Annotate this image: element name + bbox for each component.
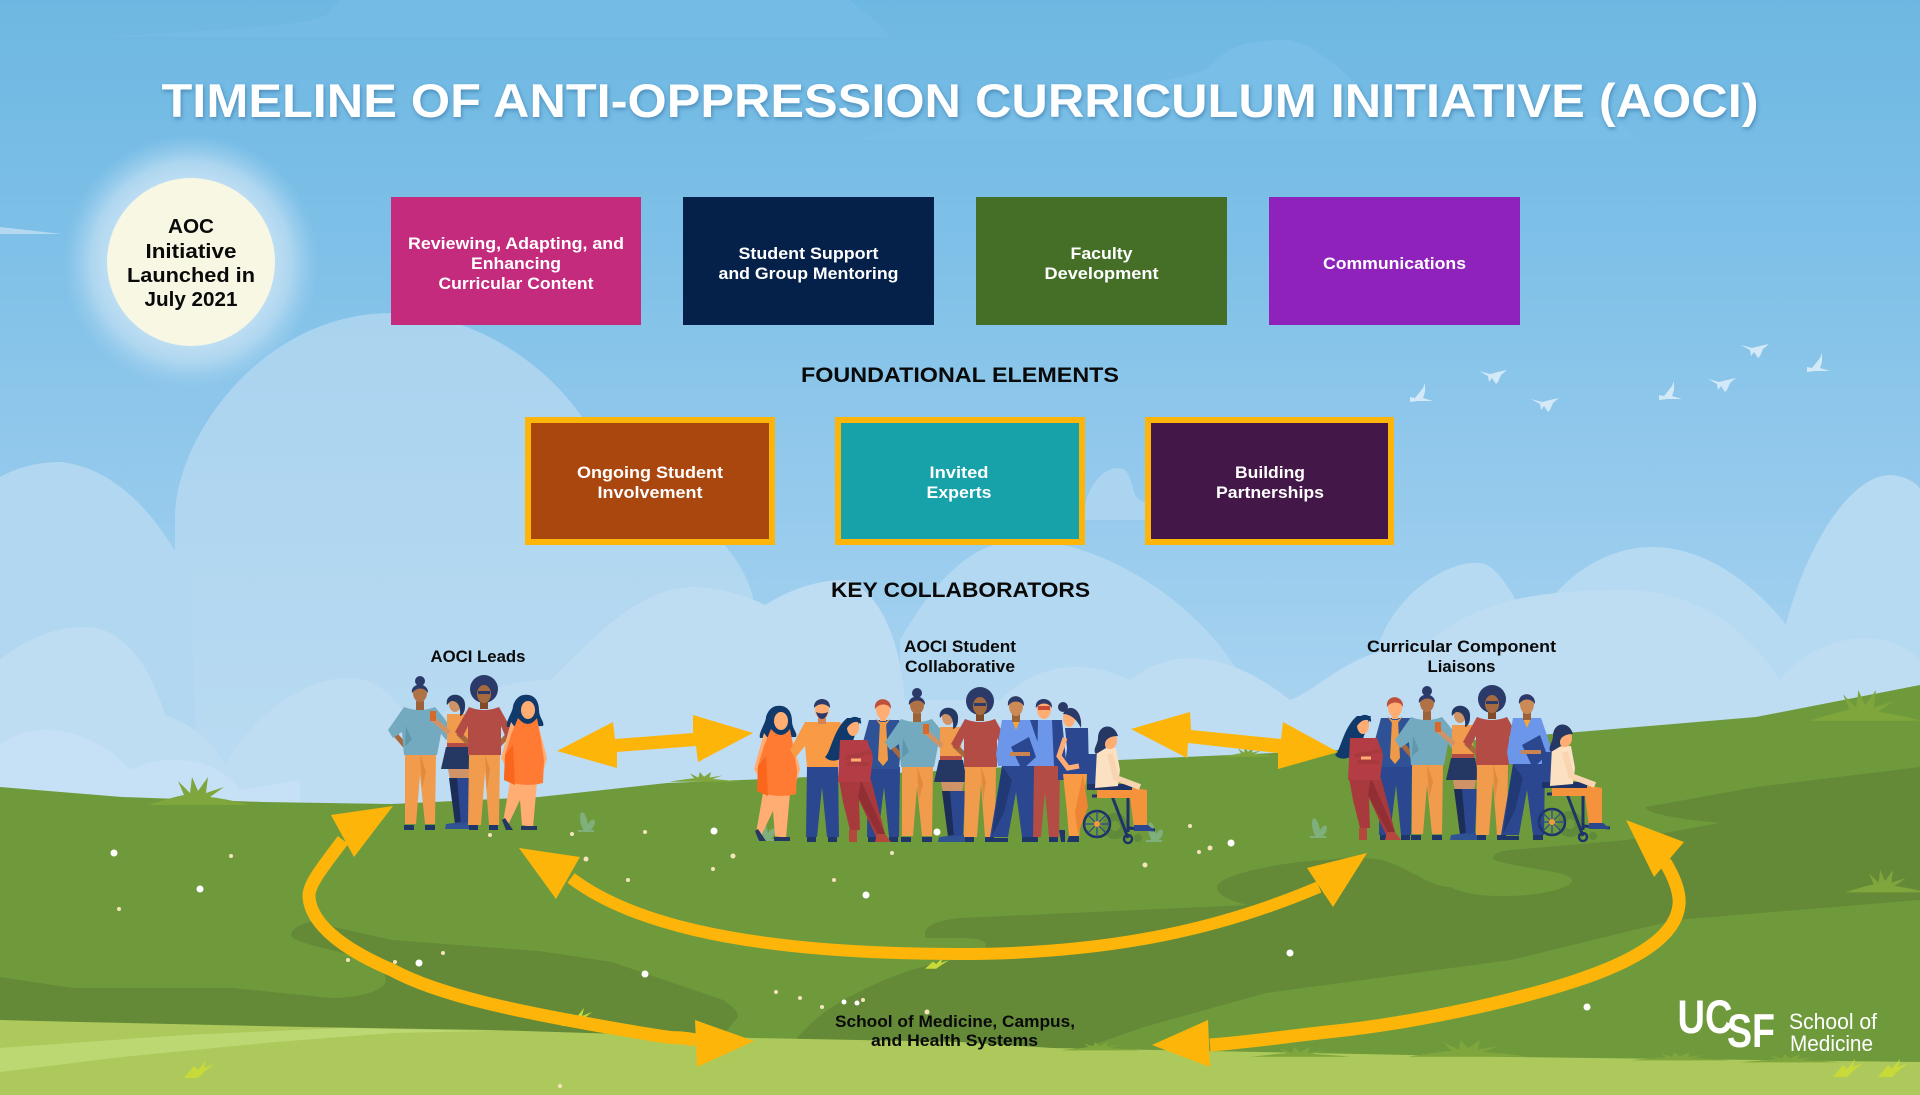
box: student support xyxy=(683,197,934,325)
label: Curricular Component Liaisons: Liaisons xyxy=(1428,657,1496,676)
label: AOCI Student Collaborative: Collaborative xyxy=(905,657,1015,676)
clouds xyxy=(0,0,1920,860)
box: building partnerships: Partnerships xyxy=(1216,483,1324,502)
label: School of Medicine, Campus, and Health Systems: School of Medicine, Campus, xyxy=(835,1012,1075,1031)
arrow: leads to liaisons (lower arc) xyxy=(519,848,1367,954)
box: student support: and Group Mentoring xyxy=(718,264,898,283)
box: building partnerships: Building xyxy=(1235,463,1305,482)
flowers xyxy=(110,824,1590,1088)
box: invited experts xyxy=(838,420,1082,542)
sun with halo xyxy=(63,134,319,390)
box: communications: Communications xyxy=(1323,254,1466,273)
people: curricular component liaisons group xyxy=(1335,685,1610,841)
heading: key collaborators: KEY COLLABORATORS xyxy=(831,579,1090,602)
arrow: liaisons to school of medicine xyxy=(1152,820,1684,1067)
logo: UCSF School of Medicine: SF xyxy=(1727,1004,1775,1057)
box: curricular content: Enhancing xyxy=(471,254,561,273)
label: Curricular Component Liaisons xyxy=(1367,637,1556,676)
people: student collaborative group xyxy=(754,687,1155,843)
box: curricular content xyxy=(391,197,641,325)
heading: foundational elements: FOUNDATIONAL ELEMENTS xyxy=(801,364,1119,387)
box: ongoing student involvement: Ongoing Student xyxy=(577,463,723,482)
logo: UCSF School of Medicine: UC xyxy=(1678,990,1732,1043)
arrow: leads to student collaborative xyxy=(557,715,753,768)
people: AOCI leads group xyxy=(388,675,547,830)
label: School of Medicine, Campus, and Health Systems xyxy=(835,1012,1075,1050)
label: School of Medicine, Campus, and Health Systems: and Health Systems xyxy=(871,1031,1038,1050)
box: curricular content: Curricular Content xyxy=(438,274,594,293)
title: TIMELINE OF ANTI-OPPRESSION CURRICULUM INITIATIVE (AOCI) xyxy=(162,75,1758,128)
label: AOCI Leads: AOCI Leads xyxy=(430,647,526,666)
label: AOCI Student Collaborative xyxy=(904,637,1016,676)
launch date text: July 2021 xyxy=(144,289,238,311)
small plants xyxy=(578,811,1329,843)
box: faculty development: Development xyxy=(1044,264,1159,283)
ground hills xyxy=(0,685,1920,1095)
birds xyxy=(1410,344,1830,412)
logo: UCSF School of Medicine: Medicine xyxy=(1790,1031,1873,1056)
launch date text: AOC xyxy=(168,216,214,238)
launch date text: Initiative xyxy=(146,241,236,263)
box: invited experts: Experts xyxy=(926,483,992,502)
logo: UCSF School of Medicine: School of xyxy=(1789,1009,1878,1034)
box: faculty development: Faculty xyxy=(1070,244,1133,263)
box: curricular content: Reviewing, Adapting, and xyxy=(408,234,624,253)
grass tufts xyxy=(148,690,1920,1062)
box: communications xyxy=(1269,197,1520,325)
box: ongoing student involvement xyxy=(528,420,772,542)
label: AOCI Student Collaborative: AOCI Student xyxy=(904,637,1016,656)
sky background xyxy=(0,0,1920,860)
launch date text: Launched in xyxy=(127,265,255,287)
box: invited experts: Invited xyxy=(930,463,988,482)
box: ongoing student involvement: Involvement xyxy=(598,483,703,502)
panel: curriculum pillars row xyxy=(391,197,1520,325)
box: building partnerships xyxy=(1148,420,1391,542)
logo: UCSF School of Medicine xyxy=(1678,990,1878,1057)
label: Curricular Component Liaisons: Curricular Component xyxy=(1367,637,1556,656)
box: student support: Student Support xyxy=(738,244,879,263)
arrow: leads to school of medicine xyxy=(309,806,754,1067)
panel: foundational elements row xyxy=(528,420,1391,542)
launch date text xyxy=(127,216,255,311)
yellow grass scribbles xyxy=(184,958,1908,1078)
box: faculty development xyxy=(976,197,1227,325)
arrow: student collaborative to liaisons xyxy=(1131,712,1338,769)
